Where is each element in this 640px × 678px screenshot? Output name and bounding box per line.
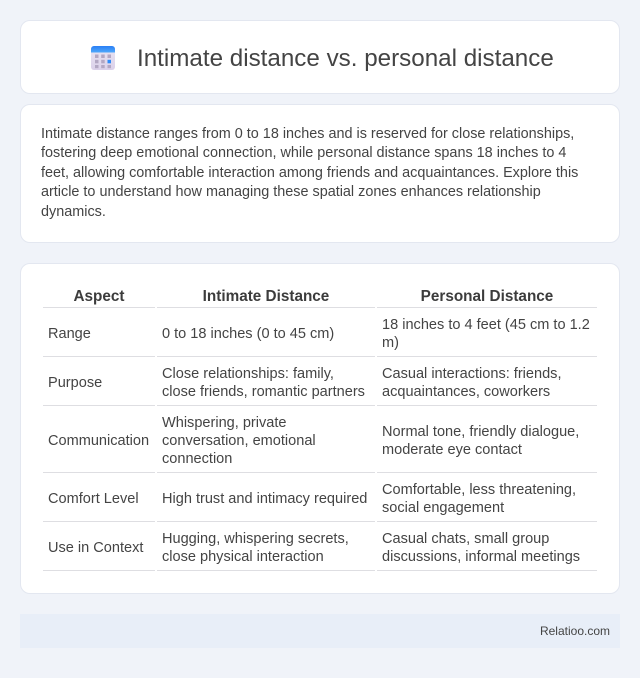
row: Range: 18 inches to 4 feet (45 cm to 1.2: [382, 317, 590, 333]
title: Intimate distance vs. personal distance: [137, 45, 554, 72]
intro paragraph: dynamics.: [41, 204, 106, 220]
table header: Personal Distance: [421, 288, 553, 305]
row: Purpose: acquaintances, coworkers: [382, 384, 550, 400]
intro paragraph: fostering deep emotional connection, while personal distance spans 18 inches to 4: [41, 145, 566, 161]
row: Communication: moderate eye contact: [382, 442, 522, 458]
row: Purpose: [43, 366, 597, 406]
footer credit: Relatioo.com: [540, 624, 610, 638]
row: Communication: Communication: [48, 433, 149, 449]
row: Purpose: Casual interactions: friends,: [382, 366, 562, 382]
row: Purpose: Close relationships: family,: [162, 366, 334, 382]
row: Comfort Level: High trust and intimacy required: [162, 491, 367, 507]
row: Communication: [43, 415, 597, 473]
table header: Aspect: [73, 288, 124, 305]
row: Comfort Level: social engagement: [382, 500, 504, 516]
row: Use in Context: Hugging, whispering secrets,: [162, 531, 349, 547]
row: Use in Context: Casual chats, small group: [382, 531, 549, 547]
intro paragraph: [41, 126, 578, 220]
row: Use in Context: Use in Context: [48, 540, 143, 556]
row: Communication: connection: [162, 451, 232, 467]
table header: [43, 288, 597, 308]
row: Range: 0 to 18 inches (0 to 45 cm): [162, 326, 334, 342]
intro paragraph: article to understand how managing these spatial zones enhances relationship: [41, 184, 541, 200]
row: Comfort Level: Comfort Level: [48, 491, 139, 507]
table header: Intimate Distance: [203, 288, 329, 305]
intro paragraph: feet, allowing comfortable interaction among friends and acquaintances. Explore this: [41, 165, 578, 181]
row: Range: Range: [48, 326, 91, 342]
row: Use in Context: [43, 531, 597, 571]
row: Use in Context: close physical interaction: [162, 549, 324, 565]
row: Purpose: close friends, romantic partners: [162, 384, 365, 400]
row: Purpose: Purpose: [48, 375, 102, 391]
row: Range: m): [382, 335, 399, 351]
row: Communication: Normal tone, friendly dialogue,: [382, 424, 579, 440]
row: Range: [43, 317, 597, 357]
row: Communication: Whispering, private: [162, 415, 287, 431]
panel: intro text: [20, 104, 620, 243]
row: Use in Context: discussions, informal meetings: [382, 549, 580, 565]
intro paragraph: Intimate distance ranges from 0 to 18 inches and is reserved for close relationships,: [41, 126, 574, 142]
row: Comfort Level: [43, 482, 597, 522]
row: Communication: conversation, emotional: [162, 433, 316, 449]
panel: comparison table: [20, 263, 620, 594]
panel: title header: [20, 20, 620, 94]
row: Comfort Level: Comfortable, less threatening,: [382, 482, 576, 498]
icon: calendar: [91, 46, 115, 70]
footer bar: [20, 614, 620, 648]
